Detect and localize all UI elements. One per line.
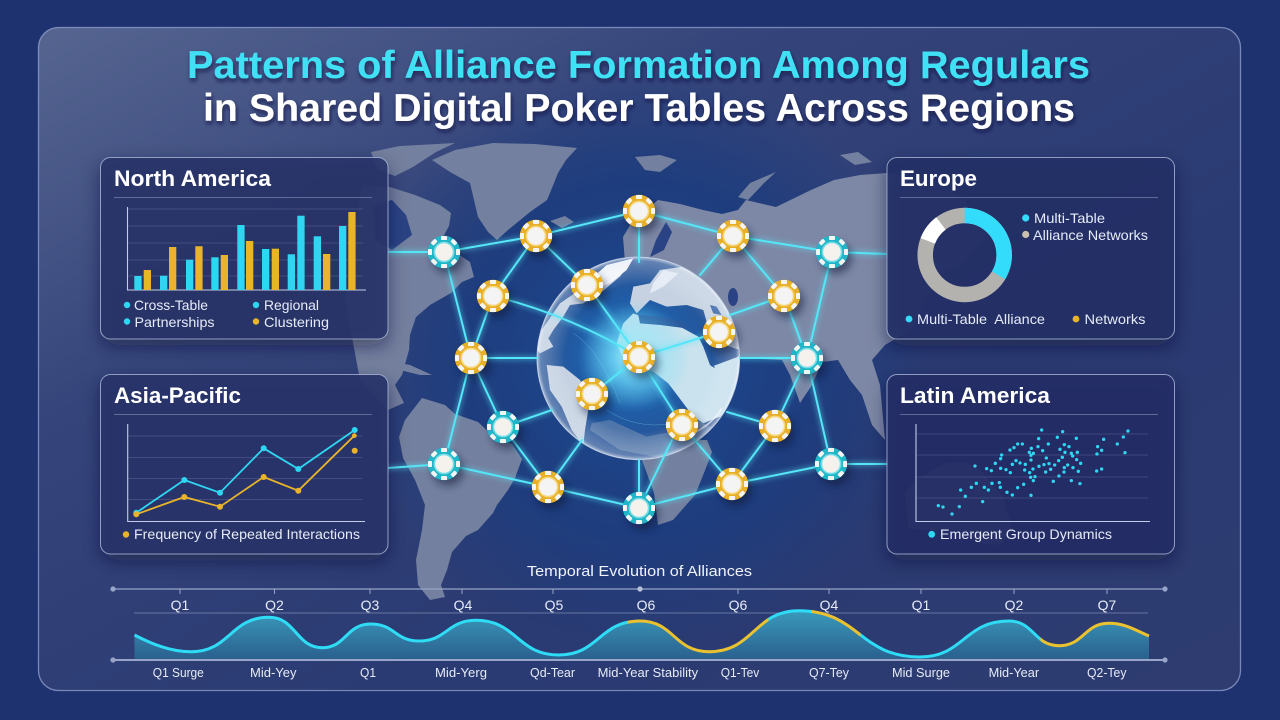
quarter labels: Q6 (637, 597, 656, 613)
panel: Asia-Pacific (100, 374, 388, 554)
legend: Partnerships (134, 314, 214, 330)
bar chart (127, 207, 366, 290)
legend: Networks (1084, 311, 1146, 327)
poker chips network (428, 195, 852, 530)
period labels: Mid-Year Stability (598, 665, 699, 680)
period labels: Qd-Tear (530, 665, 576, 680)
period labels: Mid-Year (989, 665, 1040, 680)
chip: gold node (768, 280, 804, 318)
title: in Shared Digital Poker Tables Across Regions (203, 87, 1075, 130)
chip: teal node (815, 448, 851, 486)
period labels: Q1-Tev (721, 665, 760, 680)
chip: gold node (623, 341, 659, 379)
panel: Latin America (887, 374, 1174, 554)
legend: Cross-Table (134, 297, 208, 313)
title: Patterns of Alliance Formation Among Regulars (187, 44, 1090, 87)
scatter plot (916, 424, 1150, 522)
quarter labels: Q6 (729, 597, 748, 613)
quarter labels: Q1 (912, 597, 931, 613)
timeline heading: Temporal Evolution of Alliances (527, 563, 752, 580)
world map (340, 60, 1013, 656)
chip: gold node (703, 316, 739, 354)
chip: gold node (477, 280, 513, 318)
chip: gold node (571, 269, 607, 307)
top axis (110, 586, 1168, 613)
donut chart (925, 216, 1004, 294)
baseline (110, 657, 1168, 663)
chip: gold node (532, 471, 568, 509)
quarter labels: Q2 (1005, 597, 1024, 613)
quarter labels (171, 597, 1117, 613)
chip: teal node (791, 342, 827, 380)
period labels: Q7-Tey (809, 665, 849, 680)
chip: gold node (576, 378, 612, 416)
timeline: Temporal Evolution of Alliances (110, 563, 1168, 680)
period labels: Q2-Tey (1087, 665, 1127, 680)
chip: gold node (520, 220, 556, 258)
chip: teal node (816, 236, 852, 274)
heading: Asia-Pacific: Asia-Pacific (114, 383, 241, 408)
chip: teal node (428, 448, 464, 486)
quarter labels: Q4 (820, 597, 839, 613)
chip: gold node (717, 220, 753, 258)
legend: Alliance Networks (1033, 227, 1148, 243)
heading: North America: North America (114, 166, 272, 191)
period labels (153, 665, 1127, 680)
line chart (128, 424, 365, 522)
legend: Regional (264, 297, 319, 313)
chip: gold node (716, 468, 752, 506)
heading: Latin America: Latin America (900, 383, 1051, 408)
period labels: Mid Surge (892, 665, 950, 680)
legend (906, 210, 1148, 327)
quarter labels: Q3 (361, 597, 380, 613)
heading: Europe: Europe (900, 166, 977, 191)
globe (537, 257, 742, 460)
legend: Multi-Table (1034, 210, 1105, 226)
title (187, 44, 1090, 130)
chip: teal node (428, 236, 464, 274)
period labels: Q1 (360, 665, 376, 680)
quarter labels: Q2 (265, 597, 284, 613)
quarter labels: Q5 (545, 597, 564, 613)
globe continents (537, 258, 742, 457)
chip: gold node (455, 342, 491, 380)
chip: gold node (759, 410, 795, 448)
chip: teal node (623, 492, 659, 530)
quarter labels: Q7 (1098, 597, 1117, 613)
legend: Clustering (264, 314, 329, 330)
quarter labels: Q4 (454, 597, 473, 613)
legend (124, 297, 329, 330)
legend: Emergent Group Dynamics (940, 526, 1112, 542)
period labels: Q1 Surge (153, 665, 204, 680)
area curve (134, 611, 1149, 660)
legend: Frequency of Repeated Interactions (134, 526, 360, 542)
chip: gold node (666, 409, 702, 447)
alliance network links (388, 211, 887, 508)
period labels: Mid-Yey (250, 665, 297, 680)
legend: Multi-Table Alliance (917, 311, 1045, 327)
panel: North America (100, 158, 388, 339)
panel: Europe (887, 158, 1174, 339)
quarter labels: Q1 (171, 597, 190, 613)
chip: teal node (487, 411, 523, 449)
period labels: Mid-Yerg (435, 665, 487, 680)
chip: gold node (623, 195, 659, 233)
